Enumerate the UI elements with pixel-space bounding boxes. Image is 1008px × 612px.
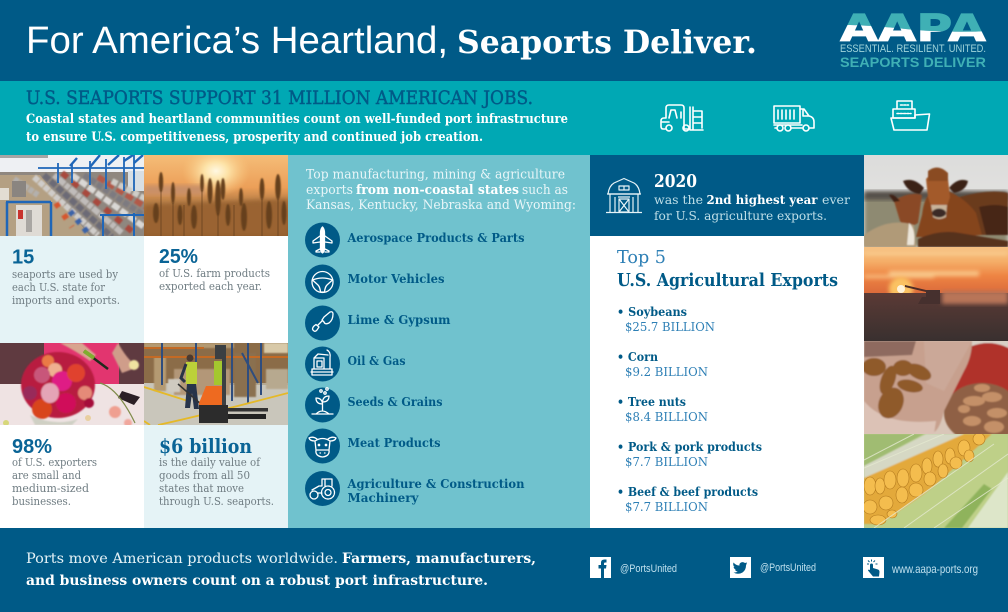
- item: corn: • Corn: [617, 349, 658, 364]
- callout text: 2020: [654, 171, 697, 192]
- item: corn: $9.2 BILLION: [625, 364, 708, 379]
- item: soybeans: • Soybeans: [617, 304, 687, 319]
- panel: top 5 agricultural exports: [590, 236, 864, 528]
- icon: cargo ship: [891, 101, 930, 130]
- intro text: from non-coastal states: [356, 183, 519, 198]
- item: beef: • Beef & beef products: [617, 484, 758, 499]
- callout text: [654, 171, 850, 223]
- item: tree nuts: [617, 394, 708, 424]
- item: agriculture and construction machinery: Machinery: [348, 490, 419, 505]
- worker: [181, 354, 199, 409]
- item: agriculture and construction machinery: Agriculture & Construction: [347, 476, 524, 491]
- panel: seaports stat: [0, 155, 146, 343]
- item: corn: [617, 349, 708, 379]
- stat: 98%: businesses.: [12, 495, 71, 508]
- logo: AAPA seaports deliver: ESSENTIAL. RESILIENT. UNITED.: [840, 43, 986, 55]
- footer message: [26, 551, 536, 589]
- facebook link: @PortsUnited: [620, 563, 677, 575]
- callout text: for U.S. agriculture exports.: [654, 208, 827, 223]
- photo: cattle: [864, 155, 1008, 247]
- stat: $6 billion: states that move: [159, 482, 244, 495]
- item: beef: $7.7 BILLION: [625, 499, 708, 514]
- jobs text: [26, 112, 568, 145]
- stat: 15: imports and exports.: [12, 294, 120, 307]
- stat: 15: 15: [12, 246, 34, 268]
- item: pork: • Pork & pork products: [617, 439, 762, 454]
- website link: [863, 557, 978, 578]
- item: meat products: [305, 428, 440, 464]
- jobs heading: U.S. SEAPORTS SUPPORT 31 MILLION AMERICAN JOBS.: [26, 87, 533, 109]
- stat: $6 billion: goods from all 50: [159, 469, 250, 482]
- facebook link: [590, 557, 677, 578]
- item: beef: [617, 484, 758, 514]
- jobs text: to ensure U.S. competitiveness, prosperity and continued job creation.: [26, 130, 483, 145]
- logo: AAPA seaports deliver: SEAPORTS DELIVER: [840, 54, 986, 70]
- item: aerospace: [305, 222, 524, 258]
- panel: 2020 callout: [590, 155, 864, 236]
- callout text: 2nd highest year: [706, 192, 818, 207]
- teal jobs band: [0, 81, 1008, 155]
- item: motor vehicles: Motor Vehicles: [348, 271, 444, 286]
- logo: AAPA seaports deliver: AAPA: [840, 7, 986, 50]
- item: aerospace: Aerospace Products & Parts: [347, 230, 524, 245]
- panel: exports from non-coastal states: [288, 155, 590, 528]
- item: soybeans: $25.7 BILLION: [625, 319, 715, 334]
- heading: U.S. Agricultural Exports: [617, 270, 838, 291]
- callout text: was the: [654, 192, 703, 207]
- item: tree nuts: • Tree nuts: [617, 394, 686, 409]
- item: oil and gas: Oil & Gas: [348, 353, 406, 368]
- item: tree nuts: $8.4 BILLION: [625, 409, 708, 424]
- photo: combine at sunset: [864, 247, 1008, 341]
- title: For America’s Heartland,: [26, 20, 448, 62]
- stat: 25%: [159, 246, 270, 293]
- item: motor vehicles: [305, 264, 444, 300]
- stat: 15: [12, 246, 120, 307]
- intro text: Kansas, Kentucky, Nebraska and Wyoming:: [306, 198, 576, 213]
- stat: 15: seaports are used by: [12, 268, 119, 281]
- footer message: Ports move American products worldwide.: [26, 551, 338, 567]
- icon: forklift: [661, 105, 703, 131]
- item: soybeans: [617, 304, 715, 334]
- heading: [617, 247, 838, 291]
- photo: corn cob: [864, 434, 1008, 528]
- item: meat products: Meat Products: [348, 435, 440, 450]
- stat: 98%: are small and: [12, 469, 81, 482]
- stat: 25%: of U.S. farm products: [159, 267, 270, 280]
- heading: Top 5: [617, 247, 666, 268]
- logo: AAPA seaports deliver: [840, 13, 986, 67]
- title: Seaports Deliver.: [457, 23, 757, 61]
- item: lime and gypsum: Lime & Gypsum: [348, 312, 450, 327]
- footer message: and business owners count on a robust port infrastructure.: [26, 573, 488, 589]
- photo: florist with bouquet: [0, 343, 144, 425]
- item: seeds and grains: Seeds & Grains: [348, 394, 442, 409]
- callout text: ever: [822, 192, 850, 207]
- stat: $6 billion: [159, 434, 274, 508]
- item: pork: [617, 439, 762, 469]
- item: pork: $7.7 BILLION: [625, 454, 708, 469]
- intro text: exports: [306, 183, 353, 198]
- intro text: Top manufacturing, mining & agriculture: [306, 168, 565, 182]
- logo: AAPA seaports deliver: AAPA: [840, 7, 986, 50]
- photo: warehouse worker with pallet jack: [144, 343, 288, 425]
- stat: 25%: exported each year.: [159, 280, 262, 293]
- twitter link: [730, 557, 816, 578]
- twitter link: @PortsUnited: [760, 562, 816, 574]
- stat: 98%: of U.S. exporters: [12, 456, 97, 469]
- panel: daily value stat: [144, 343, 288, 528]
- stat: 98%: 98%: [12, 436, 52, 458]
- icon: container truck: [774, 106, 814, 131]
- photo: container port: [0, 155, 144, 236]
- photo: wheat field at sunset: [144, 155, 288, 236]
- item: oil and gas: [305, 346, 406, 382]
- item: lime and gypsum: [305, 306, 450, 340]
- item: seeds and grains: [305, 388, 442, 422]
- stat: $6 billion: is the daily value of: [159, 456, 261, 469]
- intro text: [306, 168, 576, 213]
- item: agriculture and construction machinery: [305, 471, 524, 506]
- stat: $6 billion: through U.S. seaports.: [159, 495, 274, 508]
- panel: farm products stat: [144, 145, 288, 343]
- stat: $6 billion: $6 billion: [159, 434, 252, 458]
- jobs text: Coastal states and heartland communities count on well-funded port infrastructure: [26, 112, 568, 127]
- intro text: such as: [522, 183, 568, 198]
- website link: www.aapa-ports.org: [891, 562, 978, 576]
- icon: barn: [606, 178, 642, 212]
- stat: 98%: [12, 436, 97, 508]
- panel: exporters stat: [0, 343, 144, 528]
- footer band: [0, 528, 1008, 612]
- stat: 25%: 25%: [159, 246, 198, 268]
- stat: 15: each U.S. state for: [12, 281, 106, 294]
- photo: almonds in hand: [864, 341, 1008, 434]
- title: [26, 20, 757, 62]
- stat: 98%: medium-sized: [12, 482, 89, 495]
- footer message: Farmers, manufacturers,: [342, 551, 536, 567]
- header band: [0, 0, 1008, 81]
